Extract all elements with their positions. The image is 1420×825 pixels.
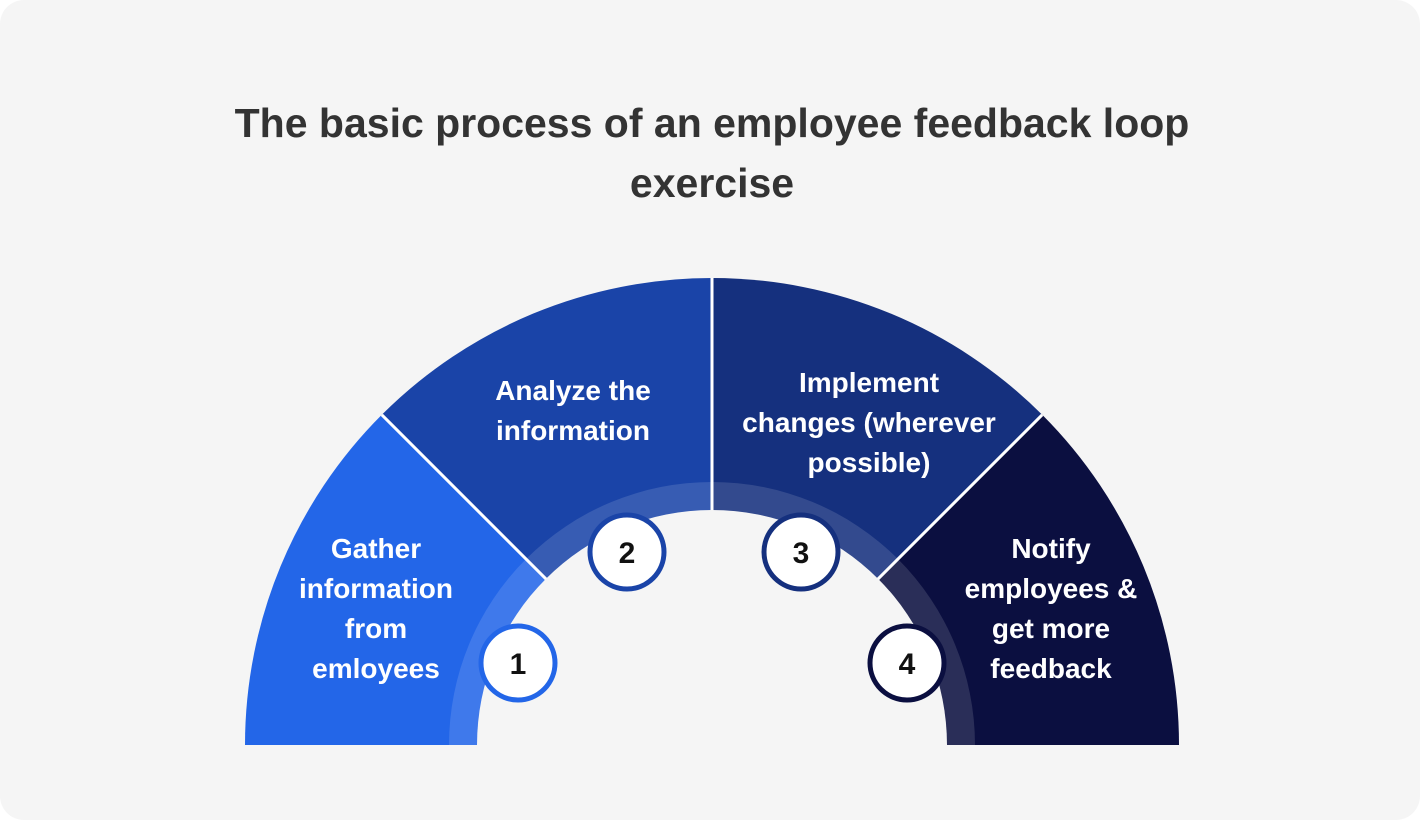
title: The basic process of an employee feedback loop bbox=[235, 100, 1189, 146]
badge 3 bbox=[764, 515, 838, 589]
text: step 1: information bbox=[299, 573, 453, 604]
text: step 4: feedback bbox=[990, 653, 1112, 684]
text: step 3 bbox=[742, 367, 996, 478]
chart: semicircle process bbox=[240, 278, 1185, 755]
badge 2: 2 bbox=[619, 537, 635, 570]
text: step 1: Gather bbox=[331, 533, 421, 564]
title: exercise bbox=[630, 160, 794, 206]
text: step 4: get more bbox=[992, 613, 1110, 644]
badge 4: 4 bbox=[899, 648, 916, 681]
title bbox=[235, 100, 1189, 206]
text: step 2: Analyze the bbox=[495, 375, 651, 406]
text: step 3: changes (wherever bbox=[742, 407, 996, 438]
text: step 1: from bbox=[345, 613, 407, 644]
segment 4 bbox=[712, 415, 1179, 745]
badge 4 bbox=[870, 626, 944, 700]
text: step 3: Implement bbox=[799, 367, 939, 398]
text: step 1 bbox=[299, 533, 453, 684]
segment 2 bbox=[382, 278, 712, 745]
segment 1 bbox=[245, 415, 712, 745]
badge 3: 3 bbox=[793, 537, 809, 570]
text: step 2 bbox=[495, 375, 651, 446]
badge 1 bbox=[481, 626, 555, 700]
text: step 3: possible) bbox=[808, 447, 930, 478]
text: step 4: employees & bbox=[965, 573, 1137, 604]
badge 1: 1 bbox=[510, 648, 526, 681]
segment 3 bbox=[712, 278, 1042, 745]
text: step 4: Notify bbox=[1011, 533, 1091, 564]
text: step 1: emloyees bbox=[312, 653, 440, 684]
badge 2 bbox=[590, 515, 664, 589]
text: step 4 bbox=[965, 533, 1137, 684]
text: step 2: information bbox=[496, 415, 650, 446]
